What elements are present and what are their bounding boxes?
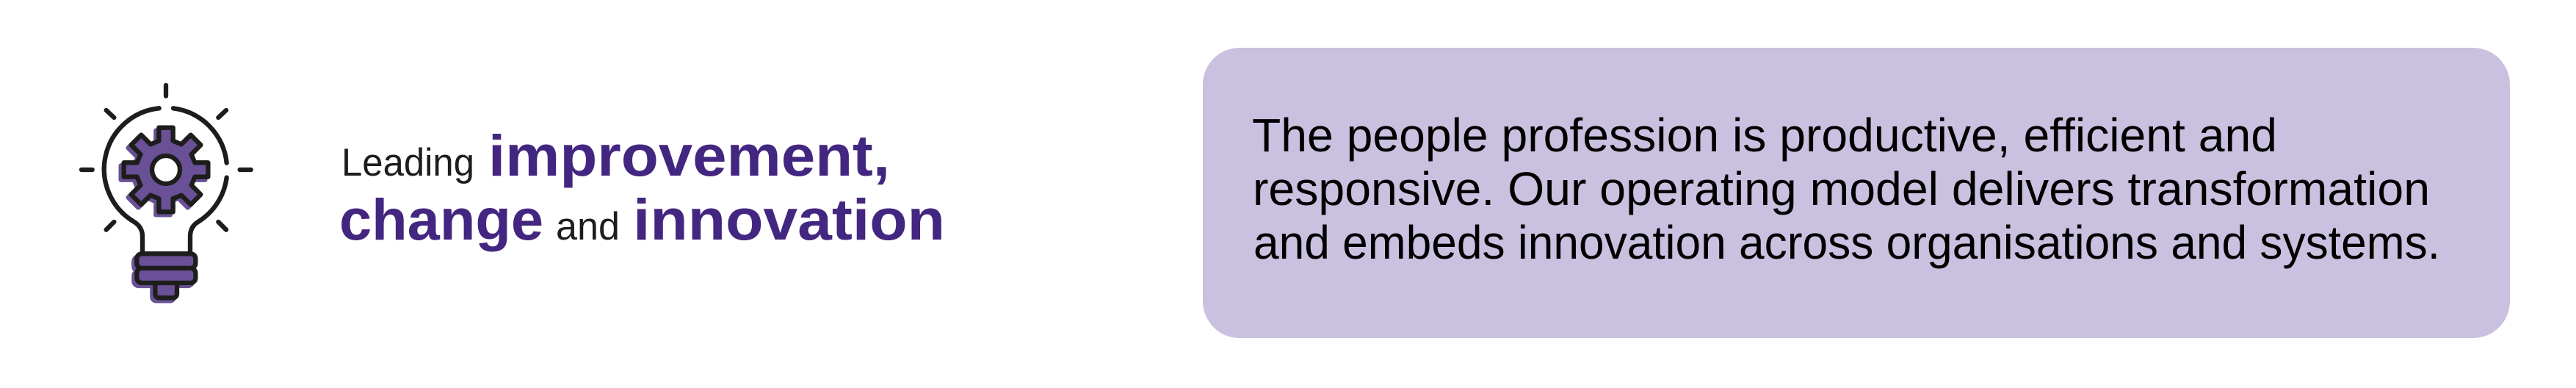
- heading line 2: innovation: [633, 187, 945, 252]
- icon: bulb base: [134, 254, 195, 301]
- description text: The people profession is productive, efficient and: [1252, 109, 2277, 162]
- icon: light bulb with gear: [82, 85, 251, 301]
- description text: responsive. Our operating model delivers transformation: [1253, 162, 2430, 215]
- description text: [1252, 109, 2440, 269]
- heading line 2: [339, 187, 945, 252]
- icon: bulb outline: [104, 108, 227, 253]
- heading line 1: Leading: [341, 141, 474, 184]
- heading line 2: change: [339, 187, 543, 252]
- panel: description: [1203, 48, 2510, 338]
- heading line 1: [341, 123, 890, 188]
- icon: gear: [121, 128, 208, 215]
- heading line 1: improvement,: [488, 123, 890, 188]
- description text: and embeds innovation across organisations and systems.: [1253, 216, 2440, 269]
- heading: [339, 123, 945, 252]
- icon: light rays: [82, 85, 251, 230]
- heading line 2: and: [556, 205, 620, 248]
- panel background: [1203, 48, 2510, 338]
